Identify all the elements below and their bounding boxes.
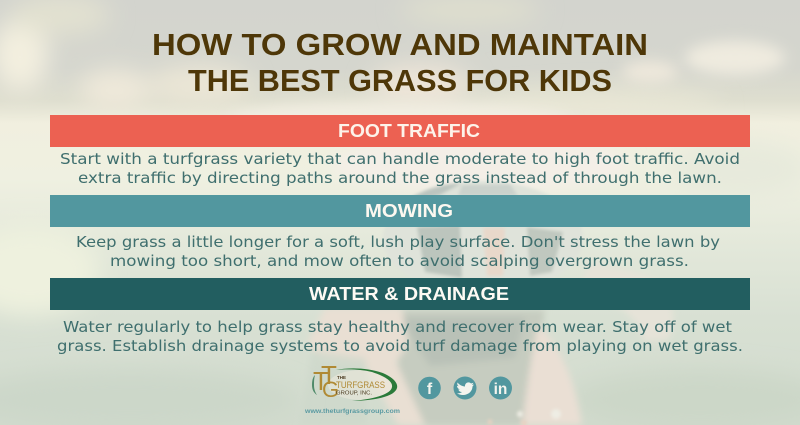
website url: www.theturfgrassgroup.com — [304, 408, 400, 415]
heading bar: water and drainage: WATER & DRAINAGE — [309, 284, 509, 304]
logo: The Turfgrass Group: T — [313, 366, 329, 396]
text: foot traffic — [60, 150, 740, 187]
title — [152, 28, 648, 98]
heading bar: mowing — [50, 195, 750, 227]
icon: twitter — [454, 376, 476, 400]
panel: foot traffic — [50, 115, 750, 187]
icon: linkedin: in — [494, 381, 507, 398]
icon: linkedin — [489, 376, 512, 400]
logo: The Turfgrass Group: THE — [337, 375, 346, 380]
child and ball — [300, 262, 673, 425]
heading bar: mowing: MOWING — [365, 201, 453, 221]
text: foot traffic: extra traffic by directing paths around the grass instead of through the lawn. — [78, 169, 722, 187]
icon: facebook: f — [427, 381, 433, 398]
text: mowing: mowing too short, and mow often to avoid scalping overgrown grass. — [110, 252, 689, 270]
logo: The Turfgrass Group: G — [322, 377, 339, 402]
text: water and drainage — [57, 318, 743, 355]
text: foot traffic: Start with a turfgrass variety that can handle moderate to high foot traffic. Avoid — [60, 150, 740, 168]
text: water and drainage: grass. Establish drainage systems to avoid turf damage from playing on wet grass. — [57, 337, 743, 355]
logo: The Turfgrass Group — [312, 360, 397, 402]
text: mowing: Keep grass a little longer for a soft, lush play surface. Don't stress the lawn by — [76, 233, 720, 251]
text: water and drainage: Water regularly to help grass stay healthy and recover from wear. Stay off of wet — [63, 318, 732, 336]
panel: water and drainage — [50, 278, 750, 355]
heading bar: foot traffic: FOOT TRAFFIC — [338, 121, 480, 141]
title: THE BEST GRASS FOR KIDS — [188, 64, 612, 98]
logo: The Turfgrass Group: T — [321, 360, 337, 390]
logo: The Turfgrass Group: GROUP, INC. — [336, 390, 373, 396]
logo: The Turfgrass Group: TURFGRASS — [336, 380, 385, 391]
icon: facebook — [418, 377, 441, 399]
text: mowing — [76, 233, 720, 270]
title: HOW TO GROW AND MAINTAIN — [152, 28, 648, 62]
panel: mowing — [50, 195, 750, 270]
heading bar: foot traffic — [50, 115, 750, 147]
heading bar: water and drainage — [50, 278, 750, 310]
